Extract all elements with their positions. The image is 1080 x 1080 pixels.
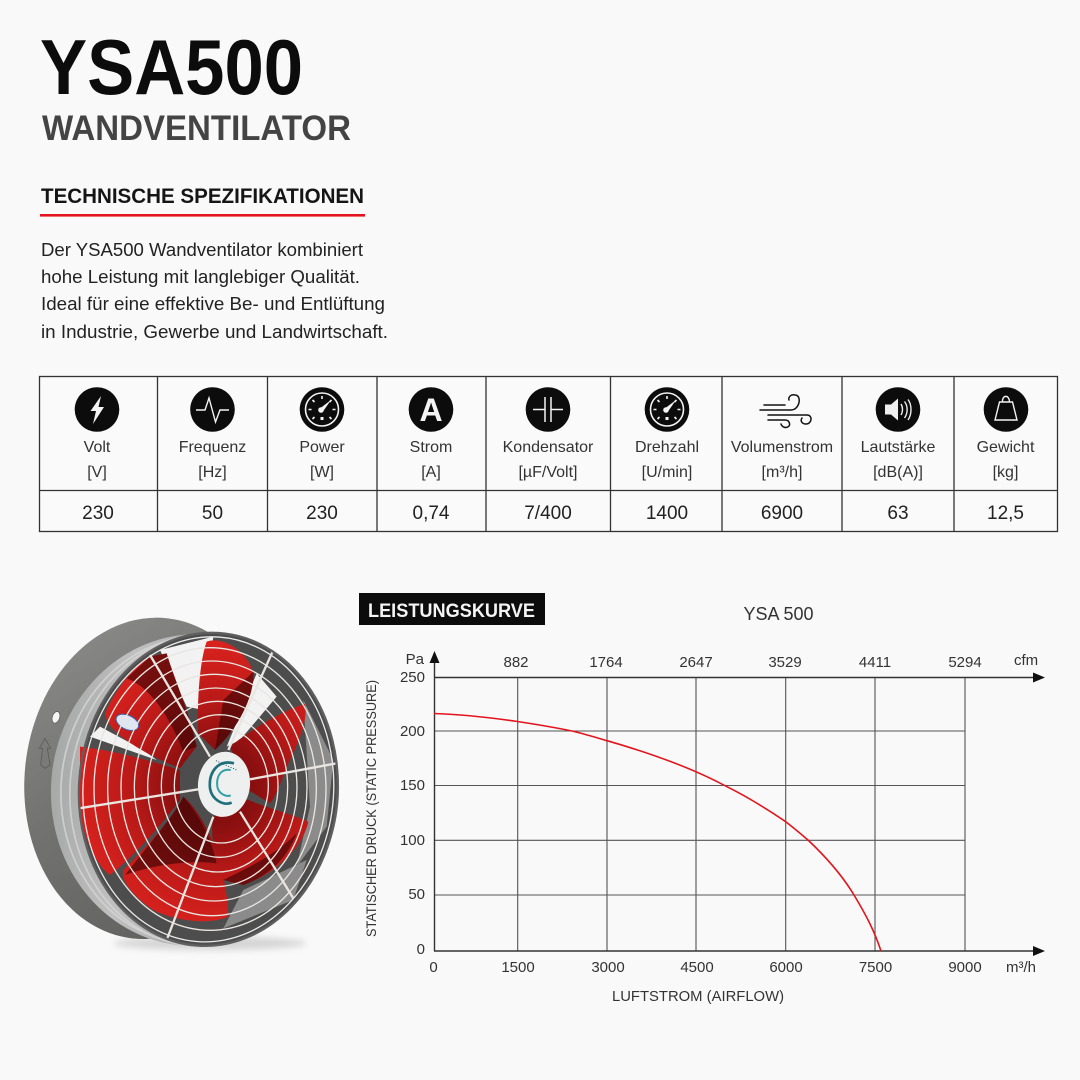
- cell: Volumenstrom: [731, 395, 833, 524]
- pressure scale: 200: [400, 723, 425, 740]
- axes: [430, 651, 1045, 956]
- cell: Lautstärke: Lautstärke: [861, 439, 935, 456]
- cell: Kondensator: Kondensator: [503, 439, 594, 456]
- cell: Frequenz: [179, 387, 246, 524]
- subtitle: WANDVENTILATOR: [42, 109, 351, 148]
- cell: Gewicht: 12,5: [987, 503, 1024, 524]
- inner silver ring: [38, 622, 352, 958]
- fan hub: [195, 749, 253, 820]
- cfm scale: 2647: [679, 654, 713, 671]
- cfm scale: [503, 652, 1038, 671]
- pressure scale: 150: [400, 777, 425, 794]
- cell: Drehzahl: [U/min]: [642, 464, 692, 481]
- cell: Volumenstrom: Volumenstrom: [731, 439, 833, 456]
- pressure scale: 250: [400, 669, 425, 686]
- cell: Power: 230: [306, 503, 338, 524]
- cell: Strom: 0,74: [413, 503, 450, 524]
- interior reflections: [90, 637, 277, 760]
- cell: Power: Power: [299, 439, 345, 456]
- description text: [41, 240, 388, 342]
- cell: Strom: [A]: [421, 464, 441, 481]
- performance curve heading: LEISTUNGSKURVE: [368, 600, 535, 622]
- cell: Kondensator: 7/400: [524, 503, 572, 524]
- cell: Volt: Volt: [84, 439, 111, 456]
- cell: Strom: [409, 387, 453, 524]
- cell: Frequenz: [Hz]: [198, 464, 227, 481]
- performance chart: [363, 651, 1045, 1005]
- blade shading: [125, 653, 297, 885]
- description text: Ideal für eine effektive Be- und Entlüftung: [41, 294, 385, 314]
- cell: Volumenstrom: 6900: [761, 503, 803, 524]
- cell: Lautstärke: [861, 387, 935, 524]
- cell: Volt: 230: [82, 503, 114, 524]
- y axis title: STATISCHER DRUCK (STATIC PRESSURE): [363, 680, 379, 937]
- cell: Lautstärke: 63: [887, 503, 909, 524]
- description text: in Industrie, Gewerbe und Landwirtschaft.: [41, 322, 388, 342]
- cell: Power: [299, 387, 345, 524]
- cell: Volumenstrom: [m³/h]: [762, 464, 802, 481]
- cell: Frequenz: Frequenz: [179, 439, 246, 456]
- airflow scale: m³/h: [1006, 959, 1036, 976]
- airflow scale: 1500: [501, 959, 535, 976]
- pressure scale: 0: [417, 941, 425, 958]
- cell: Strom: Strom: [410, 439, 452, 456]
- section heading: TECHNISCHE SPEZIFIKATIONEN: [41, 184, 364, 208]
- performance curve heading: [359, 593, 545, 625]
- cell: Volt: [V]: [87, 464, 107, 481]
- blade sticker: [113, 711, 141, 734]
- title: YSA500: [40, 23, 303, 111]
- x axis title: LUFTSTROM (AIRFLOW): [612, 988, 784, 1005]
- airflow scale: 7500: [859, 959, 892, 976]
- performance curve: [434, 714, 881, 951]
- cell: Power: [W]: [310, 464, 334, 481]
- airflow scale: 9000: [948, 959, 982, 976]
- cell: Frequenz: 50: [202, 503, 223, 524]
- housing mounting hole: [51, 710, 61, 724]
- description text: Der YSA500 Wandventilator kombiniert: [41, 240, 363, 260]
- cfm scale: 4411: [859, 654, 891, 671]
- pressure scale: 100: [400, 832, 425, 849]
- cell: Gewicht: Gewicht: [977, 439, 1035, 456]
- cell: Drehzahl: [635, 387, 699, 524]
- cell: Gewicht: [kg]: [993, 464, 1018, 481]
- cfm scale: 5294: [948, 654, 982, 671]
- cell: Volt: [75, 387, 119, 524]
- cell: Drehzahl: 1400: [646, 503, 688, 524]
- cfm scale: 882: [503, 654, 529, 671]
- cell: Gewicht: [977, 387, 1035, 524]
- specification table: [40, 376, 1058, 532]
- housing arrow mark: [39, 738, 51, 768]
- cfm scale: 3529: [768, 654, 802, 671]
- fan product illustration: [9, 605, 352, 958]
- grid lines: [434, 677, 965, 951]
- pressure scale: Pa: [406, 651, 425, 668]
- cfm scale: cfm: [1014, 652, 1038, 669]
- fan shadow: [113, 937, 307, 950]
- cfm scale: 1764: [589, 654, 623, 671]
- fan guard: [68, 624, 348, 955]
- airflow scale: 3000: [591, 959, 625, 976]
- airflow scale: 6000: [769, 959, 803, 976]
- fan blades: [80, 640, 308, 921]
- cell: Lautstärke: [dB(A)]: [873, 464, 923, 481]
- airflow scale: 0: [429, 959, 438, 976]
- cell: Kondensator: [µF/Volt]: [518, 464, 578, 481]
- pressure scale: [400, 651, 425, 958]
- pressure scale: 50: [408, 886, 425, 903]
- airflow scale: 4500: [680, 959, 714, 976]
- description text: hohe Leistung mit langlebiger Qualität.: [41, 267, 360, 287]
- fan housing: [9, 605, 291, 952]
- cell: Strom: A: [419, 392, 443, 428]
- cell: Kondensator: [503, 387, 594, 524]
- chart title: YSA 500: [743, 604, 814, 624]
- airflow scale: [429, 959, 1036, 976]
- fan interior: [68, 624, 348, 955]
- cell: Drehzahl: Drehzahl: [635, 439, 699, 456]
- heading underline: [40, 214, 365, 217]
